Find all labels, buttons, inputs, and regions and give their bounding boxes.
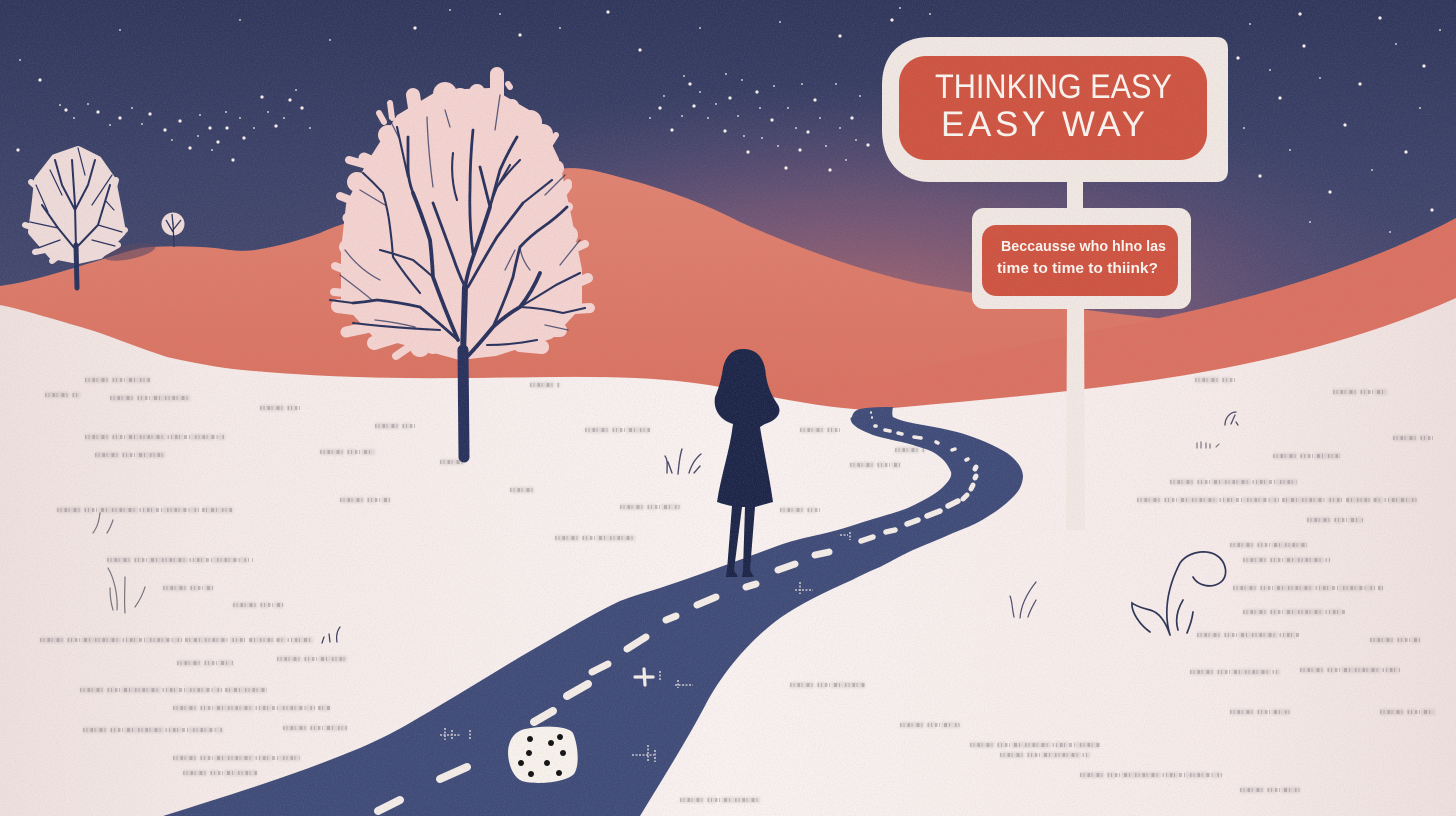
small tree left <box>25 148 125 288</box>
grass tuft with curl <box>1132 552 1226 635</box>
night sky background <box>0 0 1456 340</box>
main sign: thinking easy way: EASY WAY <box>941 105 1145 144</box>
girl silhouette <box>715 349 779 577</box>
icon: dice on road <box>508 727 578 783</box>
sign post pole <box>1066 180 1085 530</box>
snowy foreground field <box>0 298 1456 816</box>
road <box>163 407 1023 816</box>
road grass scratches <box>440 532 850 762</box>
main sign: thinking easy way <box>882 37 1228 182</box>
small shadow under far tree <box>103 240 157 264</box>
secondary sign: because who has time to think <box>972 208 1191 309</box>
big pink tree <box>330 74 590 457</box>
plus mark on road <box>635 669 653 685</box>
tiny far tree <box>162 212 184 247</box>
stars <box>18 8 1440 232</box>
hill: back coral hill <box>0 168 1200 420</box>
tree foliage <box>334 74 590 356</box>
hill: right coral hill <box>795 218 1456 420</box>
grass tufts and curl <box>93 412 1238 643</box>
snow texture patches <box>40 380 1435 800</box>
secondary sign: because who has time to think: time to time to thiink? <box>997 261 1158 277</box>
tree trunk and branches <box>330 95 585 457</box>
main sign: thinking easy way: THINKING EASY <box>935 68 1172 106</box>
road dashes <box>378 412 976 811</box>
signpost <box>882 37 1228 530</box>
secondary sign: because who has time to think: Beccausse who hlno las <box>1001 239 1166 255</box>
